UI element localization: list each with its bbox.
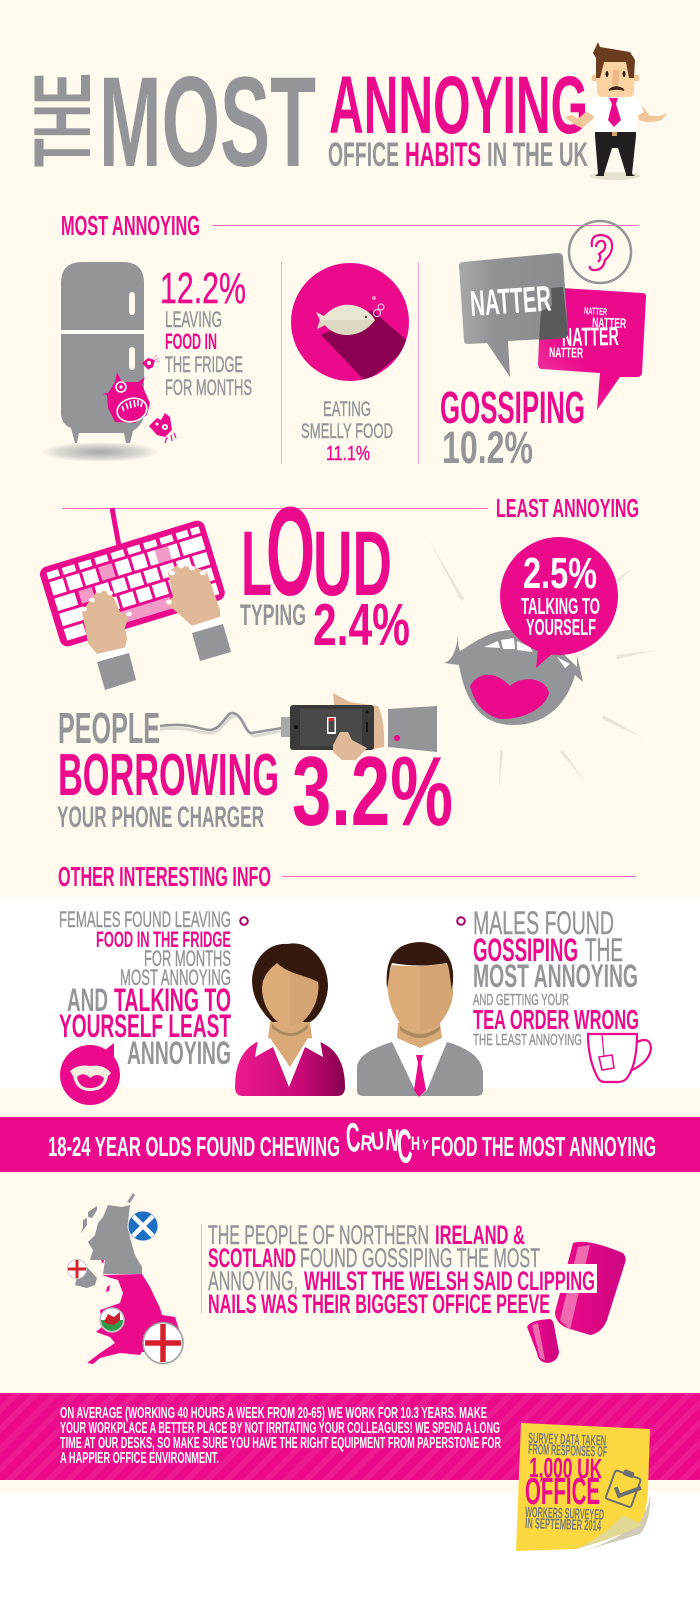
left hand — [81, 589, 136, 690]
stat: 10.2%: 10.2% — [442, 422, 533, 473]
text: gossiping: GOSSIPING — [440, 382, 585, 433]
speech bubble: 2.5%: YOURSELF — [526, 614, 596, 640]
text: northern ireland and scotland: IRELAND & — [435, 1220, 525, 1250]
text: northern ireland and scotland: THE PEOPLE OF NORTHERN — [208, 1220, 429, 1250]
text: females: FOR MONTHS — [144, 946, 231, 971]
banner: 18-24 year olds — [0, 1114, 700, 1174]
subtitle: OFFICE — [328, 136, 399, 174]
map: united kingdom with flags — [68, 1193, 183, 1364]
text: eating smelly food — [301, 398, 393, 465]
panel: talking to yourself — [429, 537, 656, 788]
text: loud — [241, 481, 392, 622]
icon: open mouth — [444, 630, 583, 725]
scotland — [81, 1193, 142, 1274]
text: crunchy: C — [344, 1114, 362, 1161]
sticky note: IN SEPTEMBER 2014 — [525, 1515, 602, 1535]
marker: male — [457, 917, 465, 925]
text: northern ireland and scotland: SCOTLAND — [208, 1243, 296, 1273]
text: leaving food in the fridge: FOOD IN — [165, 329, 217, 354]
icon: ear in circle — [569, 221, 631, 283]
text: loud: L — [241, 513, 272, 615]
icon: painted nails — [527, 1242, 626, 1363]
speech bubble: pink: NATTER — [592, 314, 626, 331]
sticky note: WORKERS SURVEYED — [525, 1504, 604, 1524]
speech bubble: grey: NATTER — [469, 277, 552, 324]
stat: 2.4%: 2.4% — [313, 592, 410, 658]
subtitle: HABITS — [405, 136, 481, 174]
flag: wales — [100, 1308, 124, 1332]
speech bubble: pink: NATTER — [584, 306, 608, 318]
illustration: man — [357, 942, 483, 1097]
panel: smelly food — [291, 263, 412, 465]
icon: tea cup — [588, 1034, 651, 1082]
title — [18, 51, 588, 194]
text: loud: UD — [313, 513, 392, 615]
text: eating smelly food: EATING — [323, 398, 371, 421]
text: crunchy — [344, 1114, 430, 1174]
text: females: YOURSELF LEAST — [59, 1008, 231, 1044]
text: males — [473, 905, 639, 1049]
icon: mouth badge — [60, 1043, 120, 1105]
text: males: GOSSIPING — [473, 932, 578, 968]
text: males: MALES FOUND — [473, 905, 614, 941]
text: eating smelly food: SMELLY FOOD — [301, 420, 393, 443]
banner: 18-24 year olds: 18-24 YEAR OLDS FOUND CHEWING — [48, 1131, 340, 1162]
illustration: woman — [235, 943, 345, 1096]
text: males: THE LEAST ANNOYING — [473, 1032, 582, 1049]
sticky note: OFFICE — [525, 1471, 600, 1513]
stat: 3.2%: 3.2% — [292, 736, 453, 846]
text: people: PEOPLE — [58, 704, 160, 753]
flag: northern ireland — [68, 1260, 86, 1278]
text: eating smelly food: 11.1% — [326, 443, 370, 465]
text: leaving food in the fridge: FOR MONTHS — [165, 375, 252, 400]
text: borrowing: BORROWING — [58, 742, 279, 808]
text: northern ireland and scotland: ANNOYING, — [208, 1266, 298, 1296]
text: males: THE — [585, 932, 623, 968]
rays — [429, 540, 656, 788]
speech bubble: 2.5%: TALKING TO — [521, 593, 600, 619]
text: females: TALKING TO — [114, 982, 231, 1018]
speech bubble: pink: NATTER — [562, 321, 619, 352]
text: females: AND — [67, 982, 108, 1018]
text: males: AND GETTING YOUR — [473, 992, 569, 1009]
text: females: MOST ANNOYING — [120, 965, 231, 990]
panel: gender band — [0, 897, 700, 1105]
text: crunchy: H — [411, 1134, 420, 1155]
sticky note: 1,000 UK — [529, 1452, 602, 1484]
footer band — [0, 1393, 700, 1480]
icon: clipboard with tick — [605, 1466, 645, 1509]
sticky note — [516, 1423, 650, 1552]
stat: 12.2%: 12.2% — [160, 264, 246, 313]
text: females: FEMALES FOUND LEAVING — [59, 907, 231, 932]
speech bubble: pink: NATTER — [549, 344, 583, 361]
icon: fish in circle — [291, 263, 412, 382]
panel: phone charger — [57, 693, 453, 846]
england and wales — [87, 1260, 183, 1364]
icon: phone with charger and hand — [160, 693, 437, 760]
panel: loud typing — [38, 481, 410, 690]
text: crunchy: U — [370, 1127, 386, 1156]
text: typing: TYPING — [240, 599, 306, 632]
icon: keyboard and hands — [38, 508, 231, 690]
flag: england — [143, 1322, 183, 1364]
text: northern ireland and scotland — [208, 1220, 595, 1319]
small monster bottom — [149, 413, 176, 443]
big monster — [102, 372, 150, 425]
title word: the: THE — [18, 73, 108, 167]
subtitle — [328, 136, 588, 174]
text: loud: O — [266, 481, 315, 622]
speech bubble: 2.5% — [500, 537, 618, 668]
small monster top — [142, 355, 160, 370]
flag: scotland — [128, 1211, 158, 1241]
title word: most: MOST — [99, 51, 316, 194]
text: crunchy: Y — [421, 1136, 430, 1153]
speech bubble: 2.5%: 2.5% — [523, 549, 597, 598]
icon: office man shrugging — [565, 42, 667, 180]
text: crunchy: R — [360, 1130, 374, 1156]
text: leaving food in the fridge — [165, 307, 252, 400]
icon: fridge with monsters — [40, 262, 176, 462]
sticky note: FROM RESPONSES OF — [528, 1441, 607, 1461]
panel: nations text and nails — [201, 1220, 626, 1363]
speech bubble: grey — [459, 253, 568, 377]
text: your phone charger: YOUR PHONE CHARGER — [57, 801, 264, 834]
text: females — [59, 907, 231, 1071]
heading: other interesting info: OTHER INTERESTING INFO — [58, 861, 271, 892]
text: northern ireland and scotland: FOUND GOSSIPING THE MOST — [300, 1243, 540, 1273]
panel: fridge — [40, 262, 252, 462]
text: leaving food in the fridge: THE FRIDGE — [165, 352, 243, 377]
text: females: FOOD IN THE FRIDGE — [96, 927, 231, 952]
marker: female — [240, 917, 248, 925]
right hand — [166, 564, 231, 661]
panel: gossiping — [440, 221, 646, 473]
text: females: ANNOYING — [127, 1035, 231, 1071]
text: crunchy: N — [384, 1122, 400, 1158]
text: crunchy: C — [396, 1120, 414, 1174]
northern ireland — [75, 1267, 97, 1288]
speech bubble: pink — [538, 287, 646, 410]
footer band: A HAPPIER OFFICE ENVIRONMENT. — [60, 1450, 219, 1467]
sticky note: SURVEY DATA TAKEN — [528, 1430, 606, 1450]
subtitle: IN THE UK — [487, 136, 588, 174]
heading: most annoying: MOST ANNOYING — [61, 210, 200, 241]
text: leaving food in the fridge: LEAVING — [165, 307, 222, 332]
